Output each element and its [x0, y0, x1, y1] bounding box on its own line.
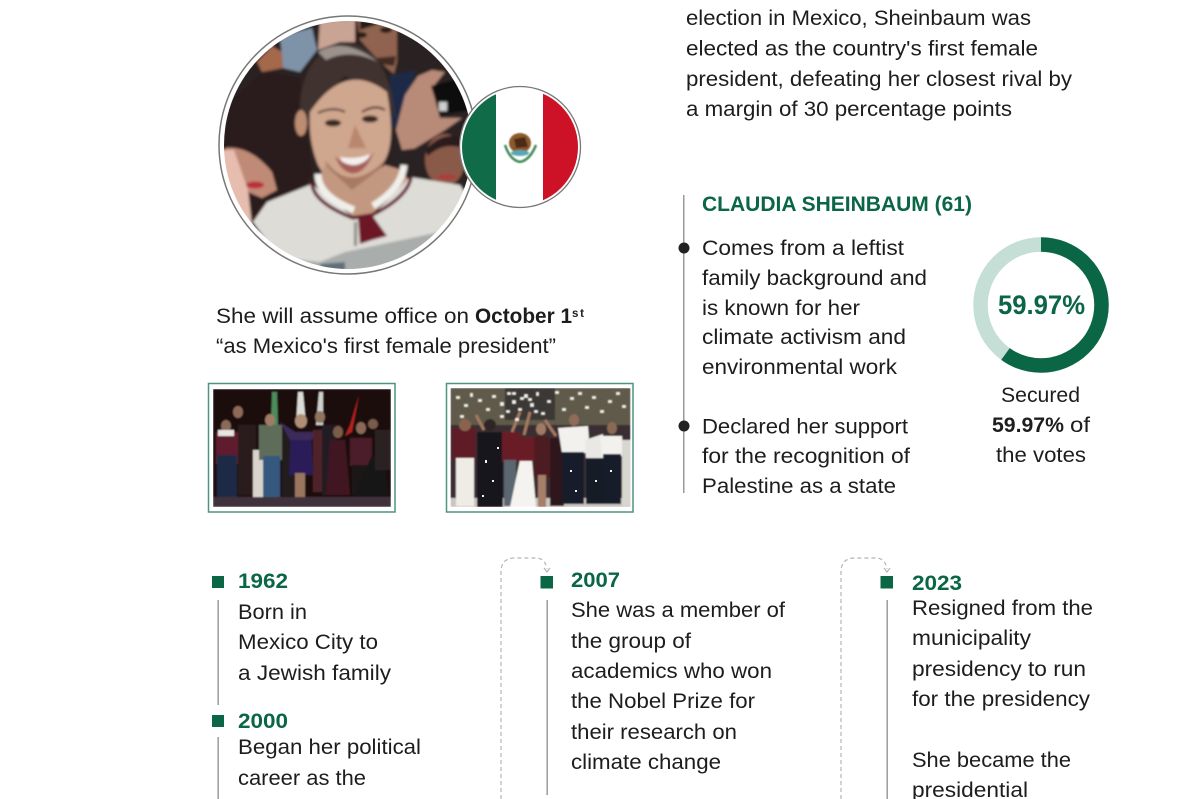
bullet: background: is known for her: [702, 297, 860, 320]
text block: election summary: president, defeating her closest rival by: [686, 68, 1073, 91]
caption: assumes office: October 1: [475, 305, 572, 328]
bullet: background: [678, 237, 927, 379]
caption: votes secured: [992, 384, 1090, 467]
timeline column 3: 2023: 2023: [912, 572, 962, 595]
caption: votes secured: 59.97%: [992, 414, 1064, 437]
timeline entry: 2000: 2000: [238, 710, 288, 733]
arrow: dashed connector to 2023: [841, 558, 890, 799]
caption: assumes office: [216, 305, 584, 358]
timeline column 2: 2007: academics who won: [571, 660, 772, 683]
caption: votes secured: the votes: [996, 444, 1086, 467]
timeline column 3: 2023: presidency to run: [912, 658, 1086, 681]
bullet: Palestine: Palestine as a state: [702, 475, 896, 498]
timeline entry: 1962: [212, 570, 392, 705]
bullet: background: climate activism and: [702, 326, 906, 349]
caption: assumes office: st: [572, 308, 584, 320]
bullet: Palestine: for the recognition of: [702, 445, 910, 468]
timeline entry: 1962: 1962: [238, 570, 288, 593]
timeline column 2: 2007: the group of: [571, 630, 691, 653]
icon: Mexican flag: [460, 85, 581, 209]
timeline entry: 2000: career as the: [238, 767, 366, 790]
photo: crowd on stage: [208, 384, 395, 512]
timeline column 3: 2023: municipality: [912, 627, 1032, 650]
bullet: background: family background and: [702, 267, 927, 290]
timeline column 3: 2023: [880, 572, 1093, 799]
donut chart: vote share: 59.97%: [998, 290, 1085, 320]
bullet: background: Comes from a leftist: [702, 237, 904, 260]
bullet: Palestine: Declared her support: [702, 416, 908, 438]
timeline column 3: 2023: She became the: [912, 749, 1071, 772]
timeline entry: 2000: Began her political: [238, 736, 421, 759]
portrait photo: [219, 15, 480, 280]
caption: assumes office: She will assume office on: [216, 305, 469, 328]
heading: candidate name: CLAUDIA SHEINBAUM (61): [702, 193, 972, 216]
timeline column 2: 2007: climate change: [571, 751, 721, 774]
timeline entry: 1962: Born in: [238, 601, 307, 624]
panel: candidate profile: [678, 193, 972, 498]
bullet: Palestine: [678, 416, 910, 498]
timeline column 2: 2007: their research on: [571, 721, 737, 744]
text block: election summary: [686, 7, 1073, 121]
timeline column 1: [212, 570, 421, 799]
donut chart: vote share: [980, 244, 1102, 366]
timeline column 2: 2007: She was a member of: [571, 599, 785, 622]
caption: votes secured: Secured: [1001, 384, 1080, 407]
timeline column 2: 2007: the Nobel Prize for: [571, 690, 755, 713]
timeline entry: 1962: a Jewish family: [238, 662, 392, 685]
timeline column 3: 2023: Resigned from the: [912, 597, 1093, 620]
bullet: background: environmental work: [702, 356, 898, 379]
timeline entry: 1962: Mexico City to: [238, 631, 378, 654]
timeline column 2: 2007: 2007: [571, 569, 620, 592]
timeline entry: 2000: [212, 710, 421, 799]
timeline column 2: 2007: [540, 569, 785, 795]
caption: votes secured: of: [1070, 414, 1090, 437]
text block: election summary: a margin of 30 percentage points: [686, 98, 1012, 121]
caption: assumes office: “as Mexico's first female president”: [216, 335, 556, 358]
text block: election summary: election in Mexico, Sheinbaum was: [686, 7, 1031, 30]
arrow: dashed connector to 2007: [501, 558, 550, 799]
text block: election summary: elected as the country's first female: [686, 38, 1038, 60]
timeline column 3: 2023: for the presidency: [912, 688, 1091, 711]
photo: confetti celebration: [446, 384, 633, 512]
